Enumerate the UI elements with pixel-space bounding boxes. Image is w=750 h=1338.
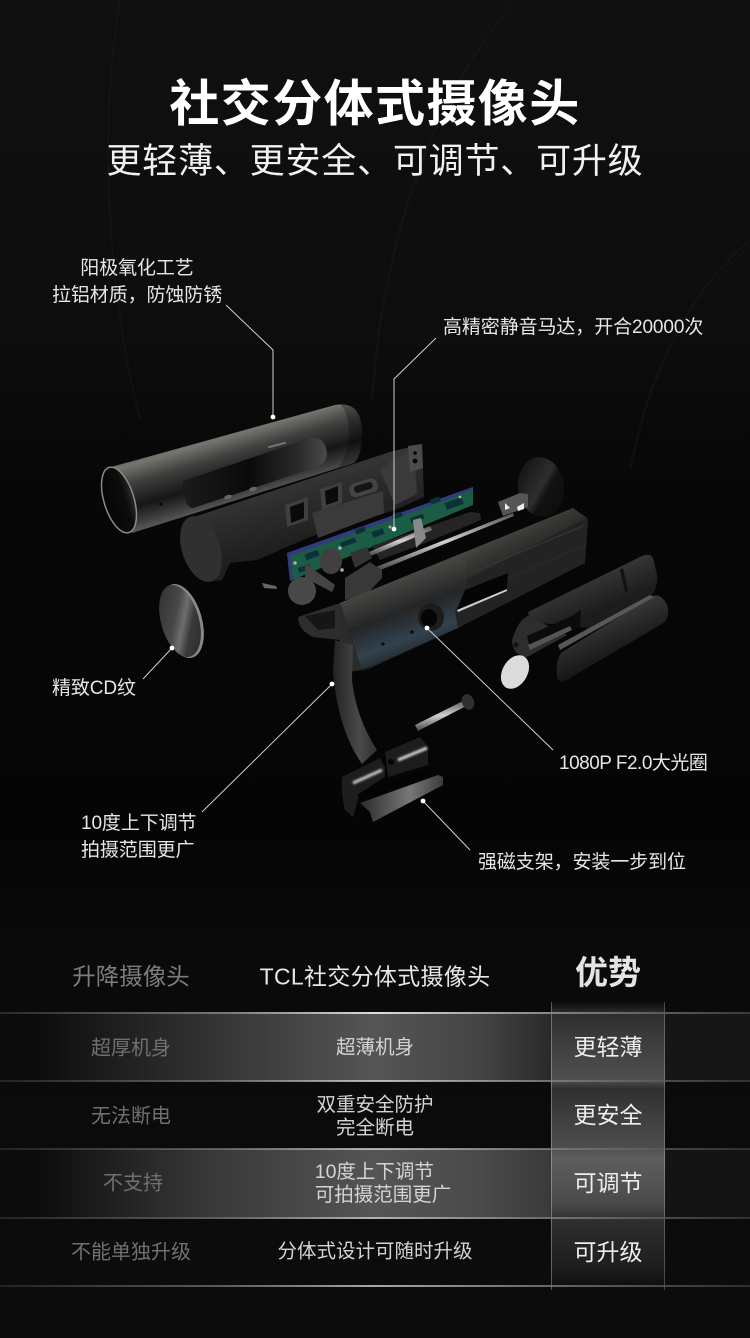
callout: anodised aluminium xyxy=(52,258,222,306)
part: carbon main bar xyxy=(298,508,588,672)
row 2 new: 完全断电 xyxy=(336,1117,414,1139)
row 2 advantage: 更安全 xyxy=(574,1102,642,1128)
callout: anodised aluminium: 拉铝材质，防蚀防锈 xyxy=(52,285,222,306)
row 4 new: 分体式设计可随时升级 xyxy=(277,1240,473,1262)
row 2 new xyxy=(316,1094,434,1139)
leader line: magnetic mount xyxy=(421,799,470,850)
table header: TCL camera: TCL社交分体式摄像头 xyxy=(260,964,490,990)
comparison table xyxy=(0,954,750,1290)
callout: aperture: 1080P F2.0大光圈 xyxy=(559,753,707,774)
row 3 new xyxy=(315,1161,451,1206)
row 2 new: 双重安全防护 xyxy=(316,1094,434,1116)
leader line: motor xyxy=(392,338,436,531)
row 1 old: 超厚机身 xyxy=(91,1038,171,1060)
part: outer aluminium tube xyxy=(95,404,362,537)
part: magnetic mount xyxy=(342,737,443,822)
silver disc xyxy=(495,650,535,694)
row 3 advantage: 可调节 xyxy=(574,1170,642,1196)
row 4 advantage: 可升级 xyxy=(574,1239,642,1265)
part: hinge pin xyxy=(415,692,476,731)
leader line: anodised tube xyxy=(226,305,275,419)
part: motor and rods xyxy=(262,512,514,605)
row 1 new: 超薄机身 xyxy=(336,1036,414,1058)
row rule xyxy=(0,1080,750,1082)
table header: lift camera: 升降摄像头 xyxy=(72,964,190,990)
callout: tilt adjustment: 拍摄范围更广 xyxy=(81,840,194,861)
subtitle: 更轻薄、更安全、可调节、可升级 xyxy=(106,142,644,181)
row 3 new: 10度上下调节 xyxy=(315,1161,434,1183)
callout: tilt adjustment: 10度上下调节 xyxy=(81,813,196,834)
callout: tilt adjustment xyxy=(81,813,196,861)
row 1 advantage: 更轻薄 xyxy=(574,1034,642,1060)
table header: advantages: 优势 xyxy=(575,954,641,991)
row rule xyxy=(0,1217,750,1219)
callout: anodised aluminium: 阳极氧化工艺 xyxy=(80,258,194,279)
callout: magnetic mount: 强磁支架，安装一步到位 xyxy=(478,852,686,873)
part: back disc and connector xyxy=(498,454,568,520)
part: rear housing xyxy=(172,444,424,587)
row rule xyxy=(0,1148,750,1150)
leader line: aperture xyxy=(425,626,553,750)
row band 1 xyxy=(0,1013,750,1081)
row 4 old: 不能单独升级 xyxy=(71,1242,191,1264)
lens xyxy=(418,603,444,631)
part: adjustable arm xyxy=(333,640,377,764)
leader line: tilt arm xyxy=(202,682,334,812)
window openings xyxy=(285,477,379,527)
callout: silent motor: 高精密静音马达，开合20000次 xyxy=(443,317,703,338)
row 3 old: 不支持 xyxy=(103,1172,163,1194)
title: 社交分体式摄像头 xyxy=(169,76,581,132)
row band 3 xyxy=(0,1149,750,1217)
row rule xyxy=(0,1285,750,1287)
callout: CD texture: 精致CD纹 xyxy=(52,678,136,699)
row 3 new: 可拍摄范围更广 xyxy=(315,1184,451,1206)
row 2 old: 无法断电 xyxy=(91,1106,171,1128)
leader line: CD texture xyxy=(143,646,174,679)
part: CD texture end cap xyxy=(152,579,212,663)
advantage column xyxy=(551,1002,665,1290)
part: circuit board xyxy=(287,487,473,581)
row rule xyxy=(0,1012,750,1014)
part: right cover pieces xyxy=(495,555,668,694)
